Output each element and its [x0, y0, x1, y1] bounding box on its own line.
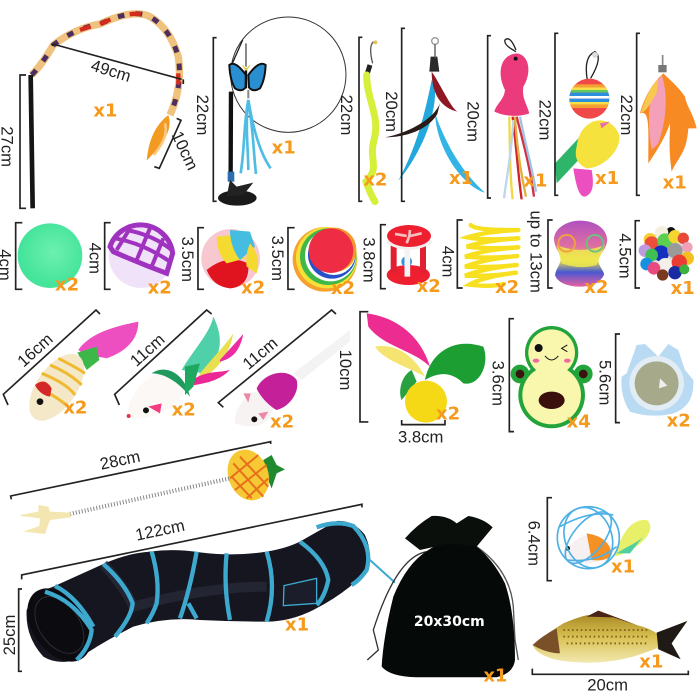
rainbow striped ball	[268, 227, 357, 299]
purple lattice ball: x2	[148, 277, 172, 298]
yellow spring	[439, 220, 519, 298]
feather teaser: 20cm	[382, 91, 401, 132]
pink and white mouse: 11cm	[239, 333, 281, 373]
green ball	[0, 223, 82, 295]
butterfly wand on suction cup: 22cm	[193, 95, 212, 135]
pineapple spring toy	[11, 442, 285, 534]
white mouse with green feathers: x2	[172, 400, 196, 421]
catnip ball: x2	[667, 411, 691, 432]
plush carp fish: x1	[639, 652, 663, 673]
feather ball: 10cm	[336, 350, 355, 390]
avocado toy: x4	[567, 411, 591, 432]
rainbow ball with feathers: x1	[595, 168, 619, 189]
yellow worm toy: x2	[363, 170, 387, 191]
catnip ball: 5.6cm	[595, 360, 614, 405]
white mouse with green feathers: 11cm	[126, 330, 168, 370]
collapsible tunnel: 122cm	[134, 516, 186, 545]
rainbow ball with feathers	[555, 33, 636, 197]
purple lattice ball	[85, 223, 173, 298]
rainbow ball with feathers: 22cm	[617, 95, 636, 135]
purple lattice ball: 4cm	[85, 243, 104, 274]
collapsible tunnel: 25cm	[0, 615, 19, 655]
velvet drawstring bag: 20x30cm	[414, 614, 485, 630]
butterfly wand on suction cup	[193, 17, 346, 206]
plush carp fish	[532, 611, 688, 695]
mesh slinky spring	[526, 210, 608, 298]
pink and white mouse	[218, 310, 350, 432]
yellow worm toy	[337, 37, 387, 202]
avocado toy	[489, 319, 593, 432]
mesh slinky spring: x2	[584, 277, 608, 298]
feather teaser: x1	[449, 168, 473, 189]
pompom ball	[615, 221, 695, 299]
pineapple spring toy: 28cm	[98, 447, 142, 474]
feather teaser	[382, 28, 485, 201]
wire ball with mouse	[524, 498, 650, 581]
pink plush fish with ribbons	[488, 36, 554, 199]
third row of mice and catnip toys	[3, 310, 693, 446]
velvet drawstring bag: x1	[483, 666, 507, 687]
feather ball: 3.8cm	[398, 427, 443, 446]
tunnel cord	[370, 560, 395, 583]
red bell roller: 3.8cm	[360, 237, 379, 283]
wand toy with leopard rope: x1	[93, 100, 117, 121]
yellow spring: 4cm	[439, 246, 458, 277]
wand toy with leopard rope	[0, 14, 202, 208]
collapsible tunnel	[0, 504, 370, 674]
top row of toys	[0, 14, 697, 208]
wand toy with leopard rope: 49cm	[89, 56, 133, 86]
sisal mouse	[3, 310, 138, 430]
pink plush fish with ribbons: x1	[523, 171, 547, 192]
rainbow striped ball: 3.5cm	[268, 236, 287, 281]
multicolour yarn ball: 3.5cm	[178, 237, 197, 282]
multicolour yarn ball: x2	[241, 277, 265, 298]
sisal mouse: x2	[63, 397, 87, 418]
bottom left: pineapple and tunnel	[0, 442, 370, 674]
feather teaser: 20cm	[464, 101, 483, 142]
avocado toy: 3.6cm	[489, 361, 508, 406]
pink plush fish with ribbons: 22cm	[535, 100, 554, 140]
second row of small balls	[0, 210, 695, 299]
wand toy with leopard rope: 10cm	[168, 128, 202, 173]
multicolour yarn ball	[178, 228, 265, 298]
orange feather teaser: x1	[663, 173, 687, 194]
rainbow striped ball: x2	[331, 278, 355, 299]
butterfly wand on suction cup: x1	[272, 137, 296, 158]
wire ball with mouse: x1	[611, 556, 635, 577]
green ball: x2	[55, 274, 79, 295]
plush carp fish: 20cm	[587, 676, 628, 695]
yellow spring: x2	[495, 277, 519, 298]
orange feather teaser	[637, 33, 697, 195]
feather ball	[336, 312, 485, 446]
pompom ball: 4.5cm	[615, 233, 634, 279]
wire ball with mouse: 6.4cm	[524, 521, 543, 566]
mesh slinky spring: up to 13cm	[526, 210, 545, 293]
feather ball: x2	[436, 403, 460, 424]
white mouse with green feathers	[115, 310, 243, 421]
sisal mouse: 16cm	[14, 329, 57, 371]
pink and white mouse: x2	[270, 411, 294, 432]
pompom ball: x1	[671, 278, 695, 299]
red bell roller: x2	[417, 276, 441, 297]
velvet drawstring bag	[367, 516, 518, 687]
red bell roller	[360, 225, 441, 297]
catnip ball	[595, 334, 693, 432]
yellow worm toy: 22cm	[337, 95, 356, 135]
collapsible tunnel: x1	[285, 615, 309, 636]
